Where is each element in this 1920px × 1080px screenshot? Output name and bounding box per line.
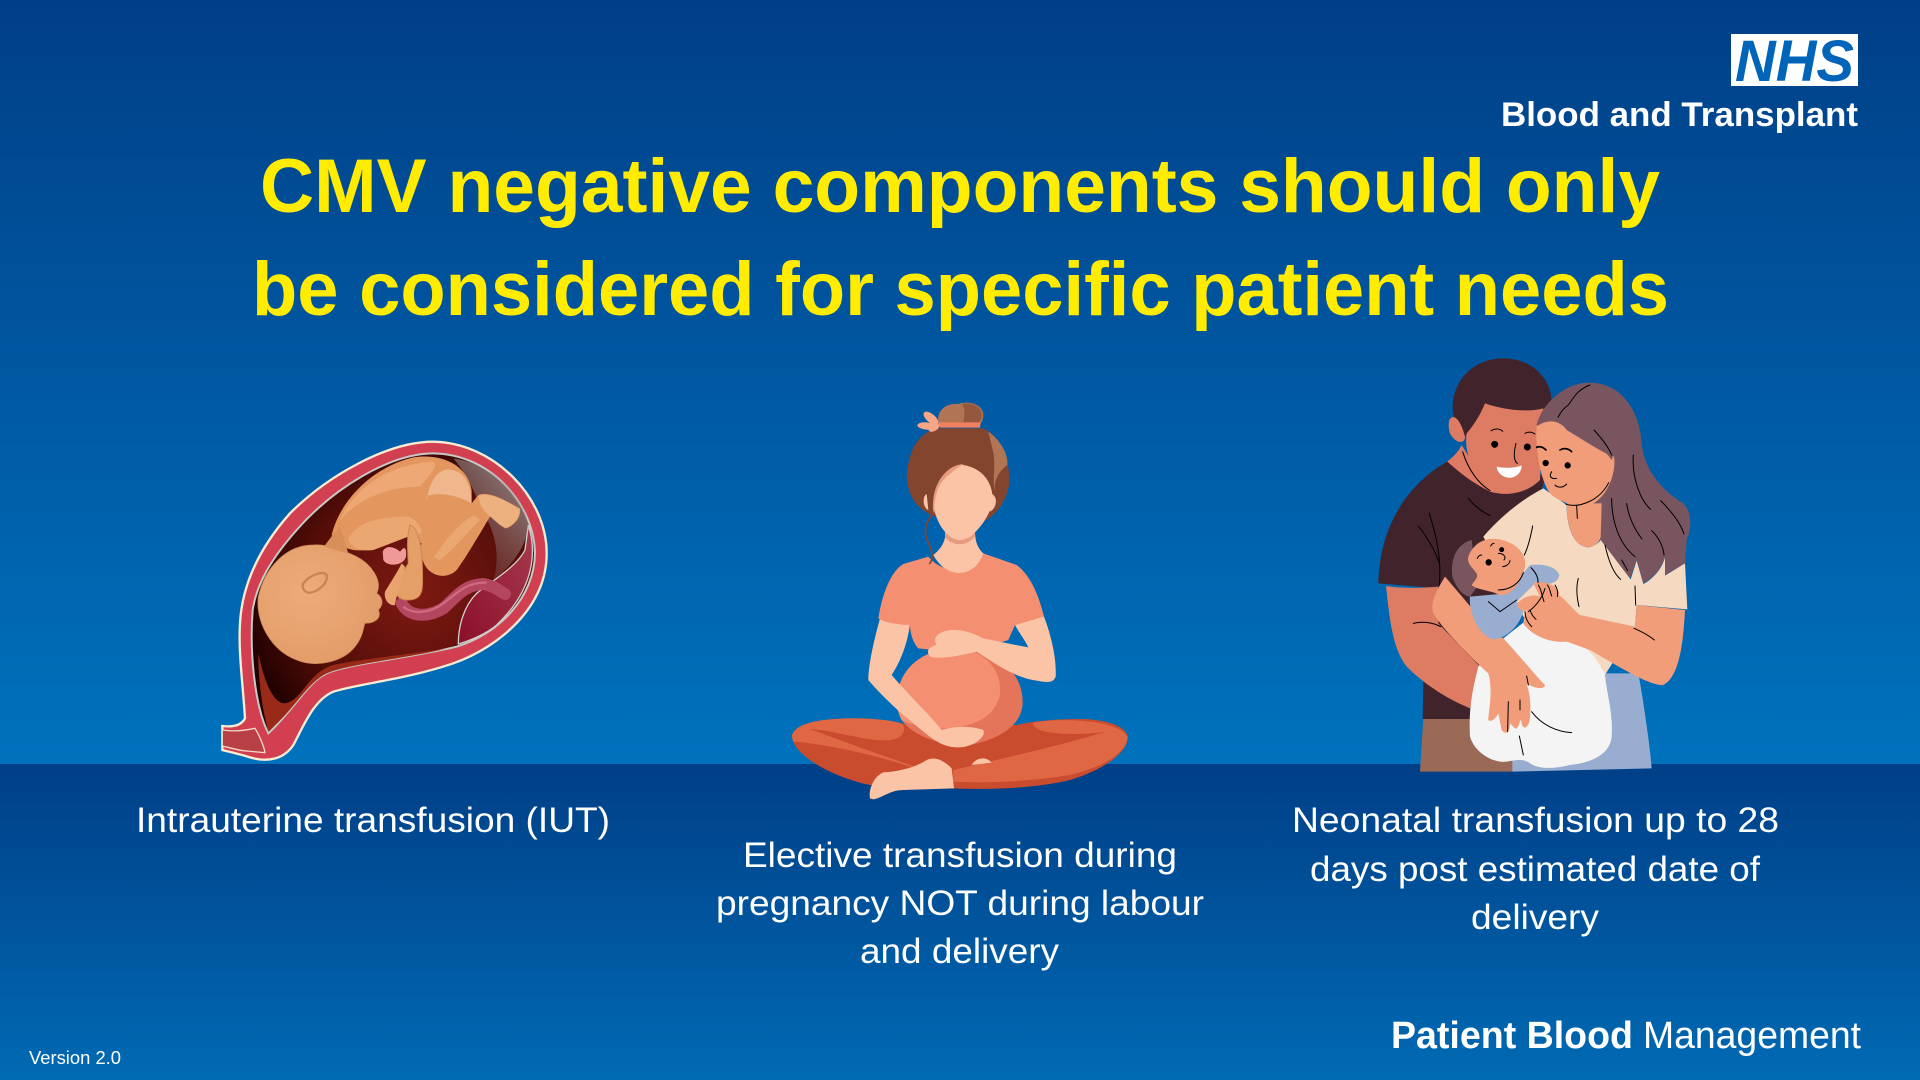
hair	[907, 428, 1009, 522]
neck	[933, 530, 983, 573]
foot	[870, 758, 954, 799]
caption: elective transfusion: and delivery	[860, 932, 1060, 971]
hair band	[938, 422, 981, 428]
legs	[792, 718, 1128, 789]
title	[252, 144, 1669, 332]
other foot	[972, 758, 992, 765]
title: be considered for specific patient needs	[252, 247, 1669, 332]
caption: elective transfusion: pregnancy NOT during labour	[716, 884, 1204, 923]
hair loose strand	[925, 513, 933, 564]
man shirt	[1378, 462, 1547, 719]
belly highlight	[896, 648, 1000, 728]
face	[933, 465, 993, 540]
NHS logo: NHS	[1735, 29, 1854, 94]
illustration: fetus in uterus	[222, 442, 547, 760]
shin highlight	[434, 515, 480, 560]
man trousers	[1420, 718, 1513, 772]
placenta	[458, 525, 532, 644]
uterus wall	[222, 442, 547, 760]
caption: neonatal transfusion	[1292, 801, 1779, 937]
face shadow	[933, 464, 963, 513]
man arm	[1386, 586, 1480, 708]
right arm	[928, 617, 1056, 682]
baby hand	[1517, 582, 1559, 611]
genital pink detail	[383, 547, 406, 565]
foot highlight	[478, 495, 519, 528]
neck shadow	[945, 532, 975, 544]
man smile	[1497, 465, 1522, 478]
man face	[1466, 403, 1543, 494]
forearm and fist	[395, 525, 423, 600]
umbilical cord	[402, 584, 505, 615]
torso and sleeves	[878, 553, 1044, 653]
woman jeans	[1512, 673, 1652, 772]
baby and hand details	[1477, 543, 1654, 755]
bun	[938, 403, 983, 427]
man features	[1413, 429, 1535, 627]
baby suit	[1470, 565, 1559, 639]
back highlight	[340, 462, 435, 520]
baby face	[1468, 539, 1525, 595]
woman hair back	[1537, 383, 1690, 583]
belly	[896, 648, 1023, 745]
title: CMV negative components should only	[260, 144, 1660, 229]
bun shade	[962, 403, 982, 423]
caption: elective transfusion	[716, 836, 1204, 971]
footer brand: Patient Blood Management: Patient Blood	[1391, 1015, 1633, 1057]
ear	[303, 573, 327, 593]
baby hair	[1452, 540, 1480, 597]
right leg highlight	[953, 720, 1128, 782]
man neck	[1447, 445, 1490, 492]
thigh highlight	[426, 469, 472, 510]
left arm	[868, 618, 984, 747]
footer brand: Patient Blood Management	[1391, 1015, 1861, 1057]
cord highlight	[403, 583, 487, 612]
woman face	[1536, 421, 1614, 505]
lower cavity shade	[258, 648, 447, 732]
woman cradling arm	[1432, 577, 1545, 733]
caption: neonatal transfusion: Neonatal transfusion up to 28	[1292, 801, 1779, 840]
background lower panel	[0, 764, 1920, 1080]
neck	[324, 527, 348, 553]
head	[258, 545, 382, 664]
background upper panel	[0, 0, 1920, 764]
woman shirt	[1483, 488, 1687, 675]
ears	[924, 494, 996, 512]
woman neck and chest	[1567, 503, 1602, 547]
man ear	[1449, 417, 1465, 442]
amniotic cavity	[252, 453, 535, 733]
caption: neonatal transfusion: days post estimated date of	[1310, 850, 1760, 889]
fluid highlight	[453, 458, 528, 580]
caption: neonatal transfusion: delivery	[1471, 898, 1600, 937]
illustration: pregnant woman	[792, 403, 1128, 799]
organisation name: Blood and Transplant	[1501, 96, 1858, 134]
footer brand: Patient Blood Management: Management	[1643, 1015, 1861, 1057]
upper arm	[348, 517, 422, 550]
woman far arm	[1523, 593, 1685, 685]
flower	[917, 409, 941, 434]
man hair	[1453, 358, 1552, 440]
hair light strand	[988, 432, 1007, 492]
body and leg	[332, 456, 520, 576]
version note: Version 2.0	[29, 1048, 121, 1068]
woman hair strand over face	[1573, 433, 1613, 460]
baby blanket	[1470, 620, 1612, 768]
second hand	[385, 563, 405, 605]
illustration: family with newborn	[1378, 358, 1690, 772]
caption: intrauterine transfusion: Intrauterine transfusion (IUT)	[136, 801, 610, 840]
left leg highlight	[792, 718, 917, 767]
cervix plug	[222, 728, 265, 753]
woman features	[1524, 385, 1684, 607]
caption: elective transfusion: Elective transfusion during	[743, 836, 1177, 875]
